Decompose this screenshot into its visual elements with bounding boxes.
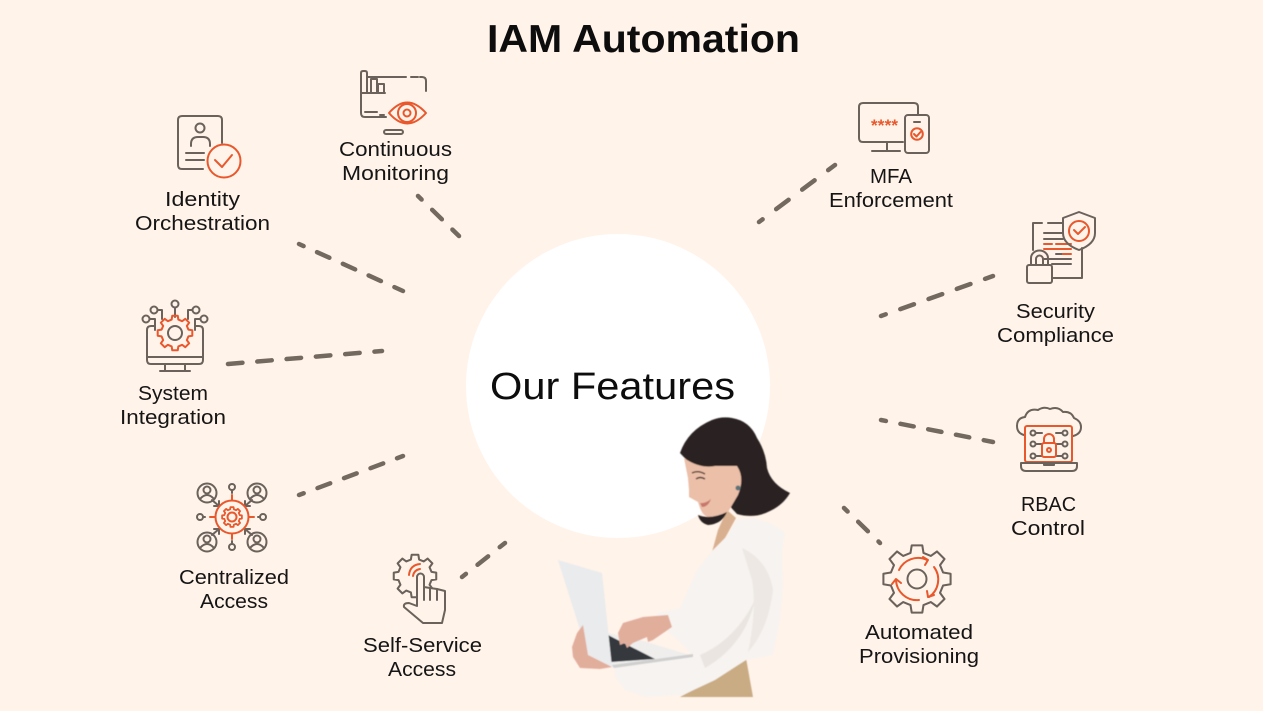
face (684, 458, 741, 518)
blouse shading (742, 548, 773, 652)
panel: Centralized Access (179, 484, 289, 613)
panel: Automated Provisioning (859, 545, 979, 668)
label (179, 567, 289, 613)
icon: monitor and phone: **** (871, 116, 898, 135)
connector: Self-Service Access (462, 543, 505, 577)
panel: System Integration (120, 300, 226, 429)
label: Access (200, 591, 268, 613)
keyboard (608, 635, 655, 662)
icon: hand touching gear (394, 555, 445, 623)
label: Monitoring (342, 163, 449, 185)
label: Compliance (997, 325, 1114, 347)
icon: document, shield and lock (1027, 212, 1095, 283)
label (829, 166, 953, 212)
connector: Security Compliance (881, 276, 993, 316)
label (1011, 494, 1085, 540)
label (363, 635, 482, 681)
sleeve fold (700, 600, 755, 668)
label (135, 189, 270, 235)
laptop lid (558, 560, 612, 667)
label: Provisioning (859, 646, 979, 668)
panel: RBAC Control (1011, 408, 1085, 540)
icon: gear with rotating arrows (883, 545, 951, 613)
laptop base (608, 633, 693, 668)
panel: Security Compliance (997, 212, 1114, 347)
label: MFA (870, 166, 913, 188)
connector: Identity Orchestration (299, 244, 403, 291)
icon: users around central gear (197, 484, 266, 552)
blouse (615, 518, 785, 697)
label: Continuous (339, 139, 452, 161)
connector: MFA Enforcement (759, 165, 835, 222)
label: Enforcement (829, 190, 953, 212)
icon: monitor with gear (142, 300, 208, 371)
label (339, 139, 452, 185)
center heading: Our Features (490, 366, 735, 408)
label (997, 301, 1114, 347)
icon: monitor with eye (361, 71, 426, 134)
label: Centralized (179, 567, 289, 589)
panel: Self-Service Access (363, 555, 482, 681)
label: System (138, 383, 208, 405)
connector: Automated Provisioning (844, 508, 880, 543)
panel: MFA Enforcement (829, 103, 953, 212)
hair back (680, 417, 790, 516)
hair flick (698, 512, 727, 525)
label: Self-Service (363, 635, 482, 657)
center circle (466, 234, 770, 538)
connector: RBAC Control (881, 420, 993, 442)
label: Integration (120, 407, 226, 429)
earring (736, 486, 740, 490)
title: IAM Automation (487, 18, 800, 61)
label: Control (1011, 518, 1085, 540)
illustration: woman using a laptop (558, 417, 790, 697)
panel: Identity Orchestration (135, 116, 270, 235)
connector: Centralized Access (299, 456, 403, 495)
typing hand (618, 615, 672, 648)
neck (712, 510, 736, 552)
label: Orchestration (135, 213, 270, 235)
label: Automated (865, 622, 973, 644)
label (859, 622, 979, 668)
label: Identity (165, 189, 240, 211)
connector: Continuous Monitoring (418, 196, 459, 236)
label: Access (388, 659, 456, 681)
skirt (680, 658, 753, 697)
lips (700, 499, 711, 507)
panel: Continuous Monitoring (339, 71, 452, 185)
label: RBAC (1021, 494, 1076, 516)
icon: identity card with check (178, 116, 240, 178)
icon: cloud laptop with lock (1017, 408, 1081, 471)
label: Security (1016, 301, 1095, 323)
label (120, 383, 226, 429)
connector: System Integration (228, 351, 382, 364)
eye and brow (692, 472, 705, 479)
laptop edge (612, 654, 693, 668)
left hand (572, 625, 612, 669)
